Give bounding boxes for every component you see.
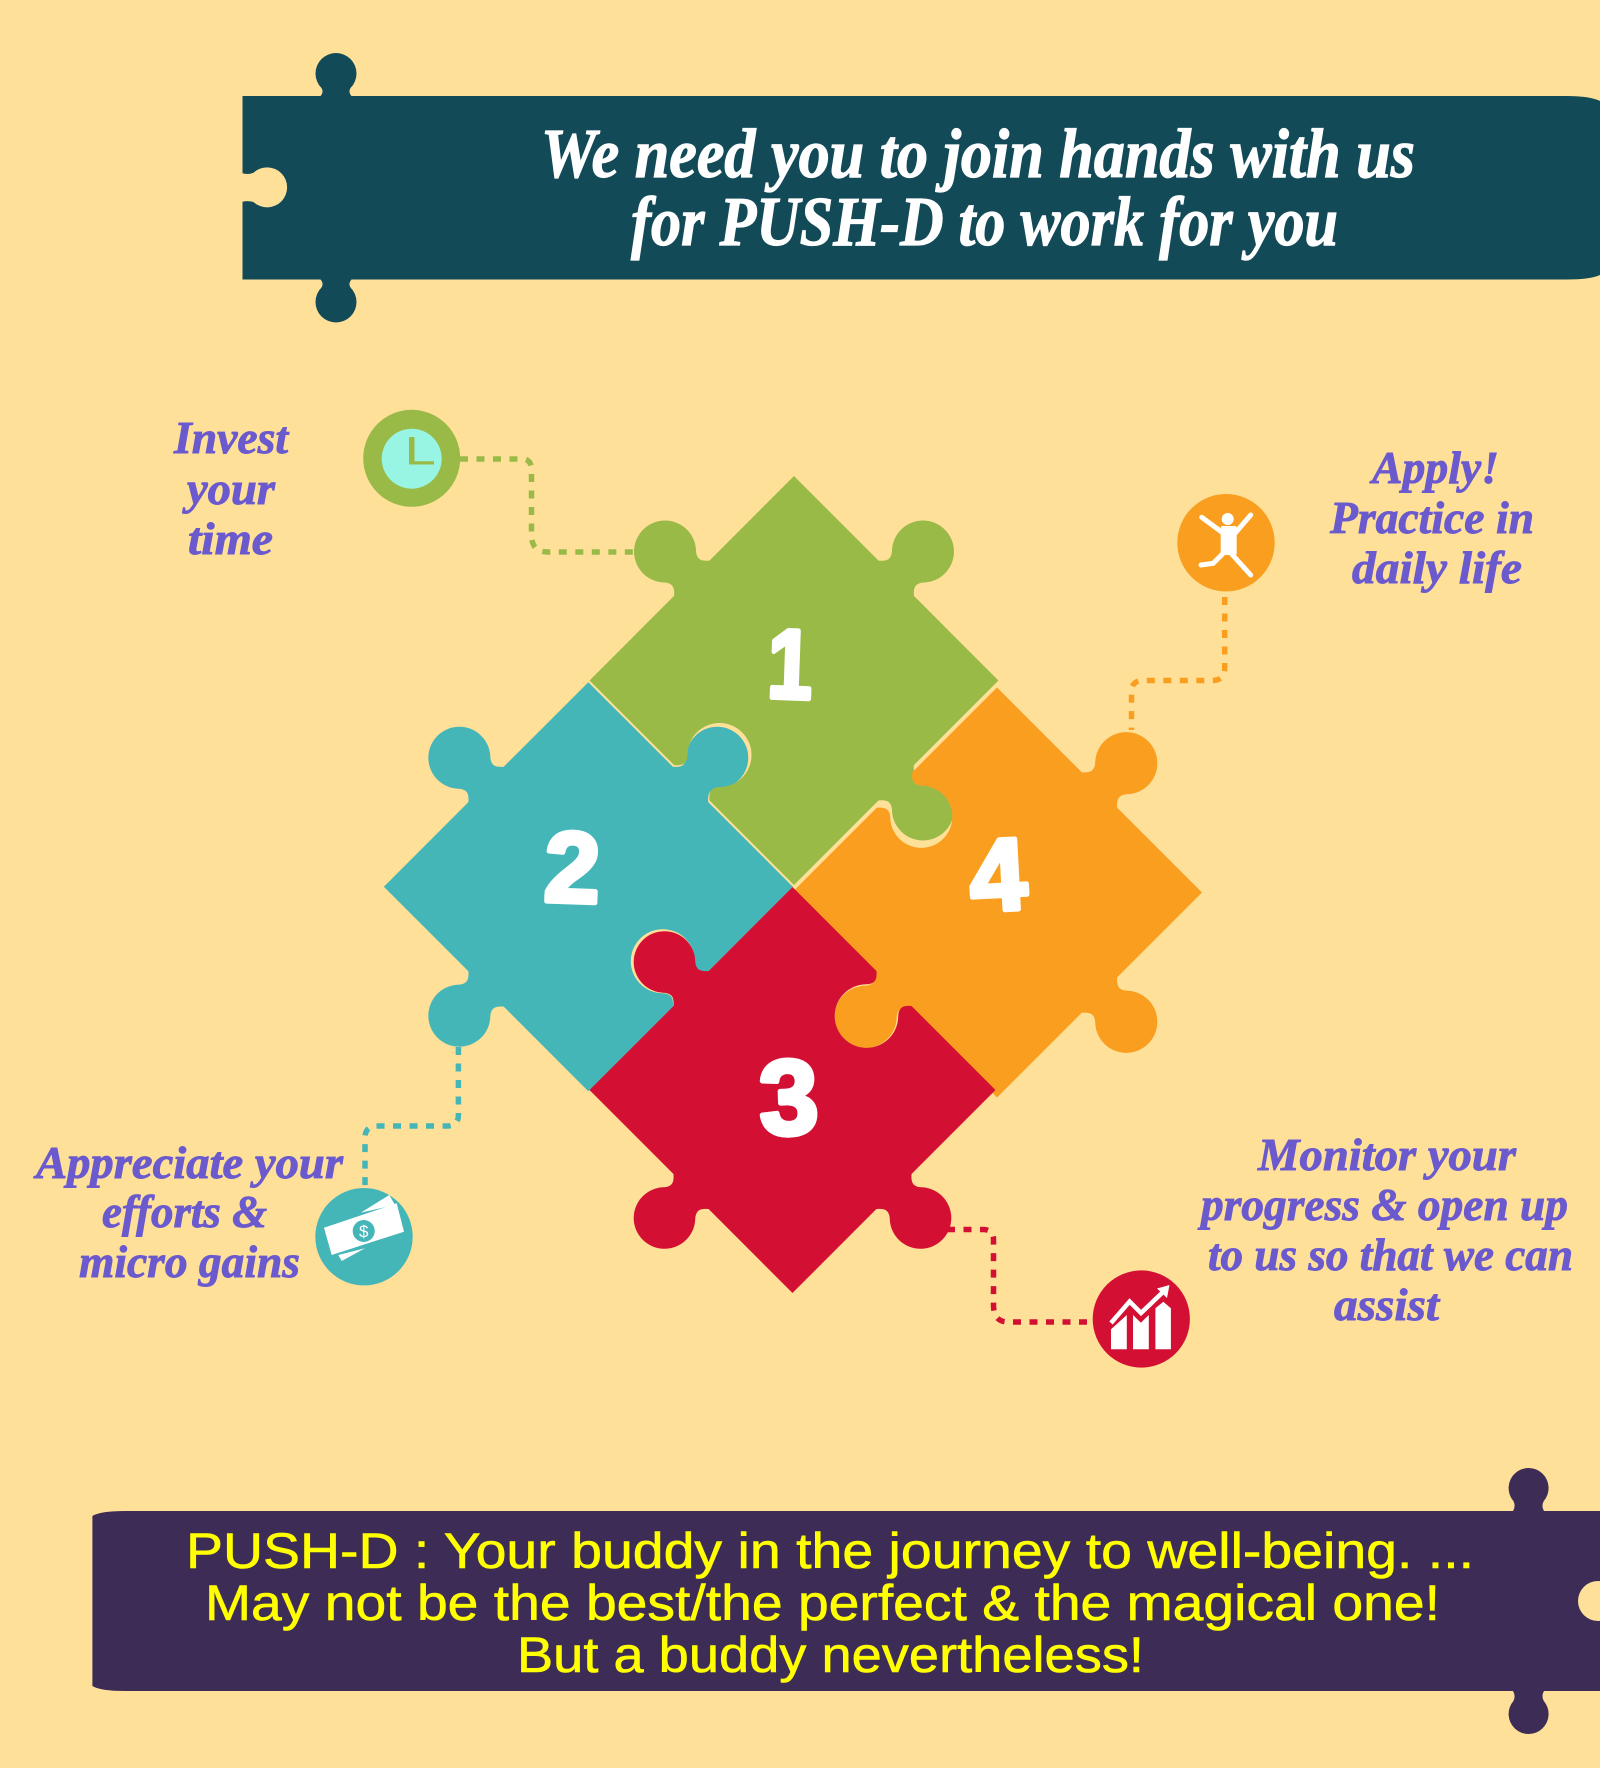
text: apply: Practice in [1329,492,1534,543]
banner notch [1578,1581,1600,1621]
banner text: But a buddy nevertheless! [517,1627,1144,1683]
text: apply: daily life [1352,542,1522,593]
text: invest your time: Invest [173,412,289,463]
text: monitor [1197,1129,1573,1330]
text: appreciate [33,1137,344,1287]
banner puzzle shape [242,53,1600,322]
title [541,116,1415,261]
text: monitor: Monitor your [1257,1129,1517,1180]
text: appreciate: micro gains [79,1236,300,1287]
number 4: 4 [967,817,1030,933]
connector: appreciate [365,1047,458,1188]
text: apply [1329,442,1534,593]
text: apply: Apply! [1369,442,1499,493]
puzzle piece 1 green [541,379,1096,934]
number 2: 2 [542,811,602,925]
title: for PUSH-D to work for you [631,184,1338,261]
title: We need you to join hands with us [541,116,1415,193]
text: appreciate: Appreciate your [33,1137,344,1188]
text: monitor: assist [1334,1279,1440,1330]
top banner [242,53,1600,322]
text: appreciate: efforts & [102,1186,267,1237]
puzzle piece 2 teal [287,585,841,1140]
text: monitor: progress & open up [1197,1179,1568,1230]
puzzle piece 4 orange [745,639,1299,1194]
banner text: May not be the best/the perfect & the magical one! [205,1575,1440,1631]
text: invest your time: time [188,513,273,564]
connector: apply [1132,597,1225,730]
banner puzzle shape [92,1468,1600,1734]
banner text [186,1523,1474,1683]
banner text: PUSH-D : Your buddy in the journey to well-being. ... [186,1523,1474,1579]
number 3: 3 [757,1038,820,1158]
puzzle piece 3 red [493,839,1044,1390]
icon: money [315,1188,413,1285]
number 1: 1 [766,609,814,720]
text: monitor: to us so that we can [1208,1229,1573,1280]
text: invest your time: your [182,463,276,514]
connector: invest time [460,459,634,552]
text: invest your time [173,412,289,564]
icon: growth chart [1093,1270,1190,1368]
bottom banner [92,1468,1600,1734]
icon: jumping person [1177,494,1275,591]
icon: clock [363,410,460,507]
connector: monitor [947,1230,1094,1322]
icon: money: $ [359,1222,369,1241]
